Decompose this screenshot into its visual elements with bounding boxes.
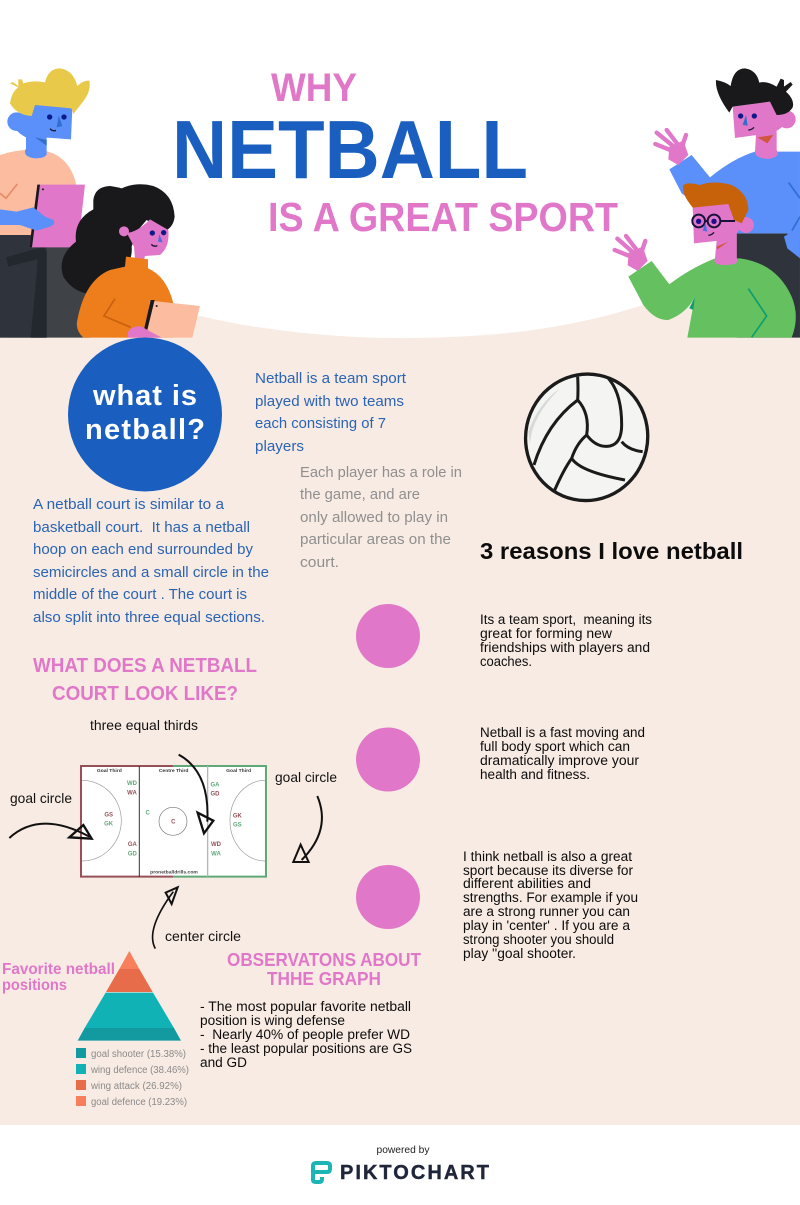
text: reason 2: health and fitness. [480, 767, 590, 782]
text: reason 3 [463, 849, 638, 961]
footer: powered by piktochart: PIKTOCHART [340, 1162, 489, 1184]
chart legend: goal defence (19.23%) [91, 1097, 187, 1108]
chart title: favorite netball positions [2, 961, 115, 994]
diagram: netball court: GA [128, 842, 137, 848]
heading: what does a netball court look like: WHAT DOES A NETBALL [33, 655, 257, 677]
text: court description: semicircles and a small circle in the [33, 565, 269, 581]
illustration: woman with tablet [62, 184, 200, 338]
text: player roles [300, 465, 462, 571]
heading: observations about the graph: OBSERVATONS ABOUT [227, 950, 421, 970]
text: netball intro: Netball is a team sport [255, 371, 406, 387]
diagram: netball court: pronetballdrills.com [150, 869, 198, 875]
text: reason 1 [480, 612, 652, 669]
label: three equal thirds: three equal thirds [90, 717, 198, 733]
diagram: netball court: WA [211, 851, 221, 857]
text: court description: middle of the court . The court is [33, 587, 247, 603]
heading: what does a netball court look like [33, 655, 257, 705]
chart legend: goal shooter (15.38%) [91, 1049, 186, 1060]
text: reason 2: dramatically improve your [480, 753, 640, 768]
heading: observations about the graph [227, 950, 421, 989]
text: court description [33, 497, 269, 626]
text: observations: position is wing defense [200, 1013, 345, 1028]
badge: what is netball: netball? [85, 414, 205, 446]
text: netball intro: players [255, 439, 304, 455]
diagram: netball court: C [171, 819, 176, 825]
arrow: to centre circle [153, 887, 178, 949]
illustration: man with black hair waving [655, 68, 800, 338]
text: player roles: particular areas on the [300, 532, 451, 548]
text: court description: basketball court. It has a netball [33, 520, 250, 536]
title [172, 66, 618, 240]
badge: what is netball [68, 338, 222, 492]
text: netball intro: played with two teams [255, 394, 404, 410]
badge: what is netball: what is [92, 380, 197, 412]
title: IS A GREAT SPORT [268, 194, 618, 240]
diagram: netball court: GK [233, 814, 242, 820]
diagram: netball court: Goal Third [97, 768, 122, 774]
text: reason 3: I think netball is also a great [463, 849, 632, 864]
diagram: netball court: WD [127, 781, 138, 787]
illustration: man with tablet [0, 68, 90, 338]
text: court description: A netball court is similar to a [33, 497, 225, 513]
panel: beige background [0, 290, 800, 1125]
text: reason 2: Netball is a fast moving and [480, 725, 645, 740]
text: reason 3: sport because its diverse for [463, 863, 633, 878]
text: observations: - The most popular favorite netball [200, 999, 411, 1014]
text: observations: and GD [200, 1055, 247, 1070]
label: left goal circle: goal circle [10, 790, 72, 806]
text: reason 3: different abilities and [463, 876, 591, 891]
text: reason 3: play in 'center' . If you are a [463, 918, 630, 933]
text: court description: also split into three equal sections. [33, 610, 265, 626]
title: WHY [271, 66, 357, 110]
chart title: favorite netball positions: positions [2, 977, 67, 994]
arrow: to right goal circle [293, 796, 322, 862]
diagram: netball court: C [145, 811, 150, 817]
chart: pyramid [78, 951, 181, 1041]
text: player roles: court. [300, 555, 339, 571]
title: NETBALL [172, 103, 528, 196]
text: reason 1: great for forming new [480, 626, 612, 641]
text: reason 2 [480, 725, 645, 782]
text: reason 3: play ''goal shooter. [463, 946, 576, 961]
text: reason 1: coaches. [480, 654, 532, 669]
icon: reason bullet 3 [356, 865, 420, 929]
label: center circle: center circle [165, 928, 241, 944]
text: netball intro [255, 371, 406, 455]
text: observations: - Nearly 40% of people prefer WD [200, 1027, 410, 1042]
chart legend: wing defence (38.46%) [90, 1065, 189, 1076]
footer: powered by piktochart: powered by [376, 1145, 430, 1156]
text: reason 3: strong shooter you should [463, 932, 614, 947]
text: reason 1: friendships with players and [480, 640, 650, 655]
arrow: to centre third [179, 755, 213, 833]
text: player roles: only allowed to play in [300, 510, 448, 526]
diagram: netball court: GD [128, 851, 137, 857]
diagram: netball court: WD [211, 842, 222, 848]
text: reason 2: full body sport which can [480, 739, 630, 754]
diagram: netball court: GA [210, 783, 220, 789]
diagram: netball court: GS [233, 823, 242, 829]
diagram: netball court: WA [127, 790, 137, 796]
icon: reason bullet 2 [356, 728, 420, 792]
text: reason 1: Its a team sport, meaning its [480, 612, 652, 627]
heading: what does a netball court look like: COURT LOOK LIKE? [52, 683, 238, 705]
icon: reason bullet 1 [356, 604, 420, 668]
text: netball intro: each consisting of 7 [255, 416, 386, 432]
diagram: netball court: GD [210, 792, 220, 798]
text: player roles: Each player has a role in [300, 465, 462, 481]
chart legend: wing attack (26.92%) [90, 1081, 182, 1092]
chart title: favorite netball positions: Favorite netball [2, 961, 115, 978]
text: court description: hoop on each end surrounded by [33, 542, 254, 558]
text: reason 3: strengths. For example if you [463, 890, 638, 905]
chart legend [76, 1048, 189, 1108]
text: observations: - the least popular positions are GS [200, 1041, 412, 1056]
text: reason 3: are a strong runner you can [463, 904, 630, 919]
diagram: netball court [81, 766, 266, 877]
text: player roles: the game, and are [300, 487, 420, 503]
diagram: netball court: GK [104, 822, 114, 828]
diagram: netball court: Goal Third [226, 768, 251, 774]
arrow: to left goal circle [9, 824, 92, 839]
heading: 3 reasons: 3 reasons I love netball [480, 538, 743, 564]
diagram: netball court: GS [104, 813, 113, 819]
icon: netball [514, 363, 659, 512]
label: right goal circle: goal circle [275, 769, 337, 785]
footer: powered by piktochart [313, 1145, 489, 1184]
illustration: man with glasses waving [615, 182, 796, 338]
heading: observations about the graph: THHE GRAPH [267, 969, 381, 989]
text: observations [200, 999, 412, 1070]
diagram: netball court: Centre Third [159, 768, 188, 774]
